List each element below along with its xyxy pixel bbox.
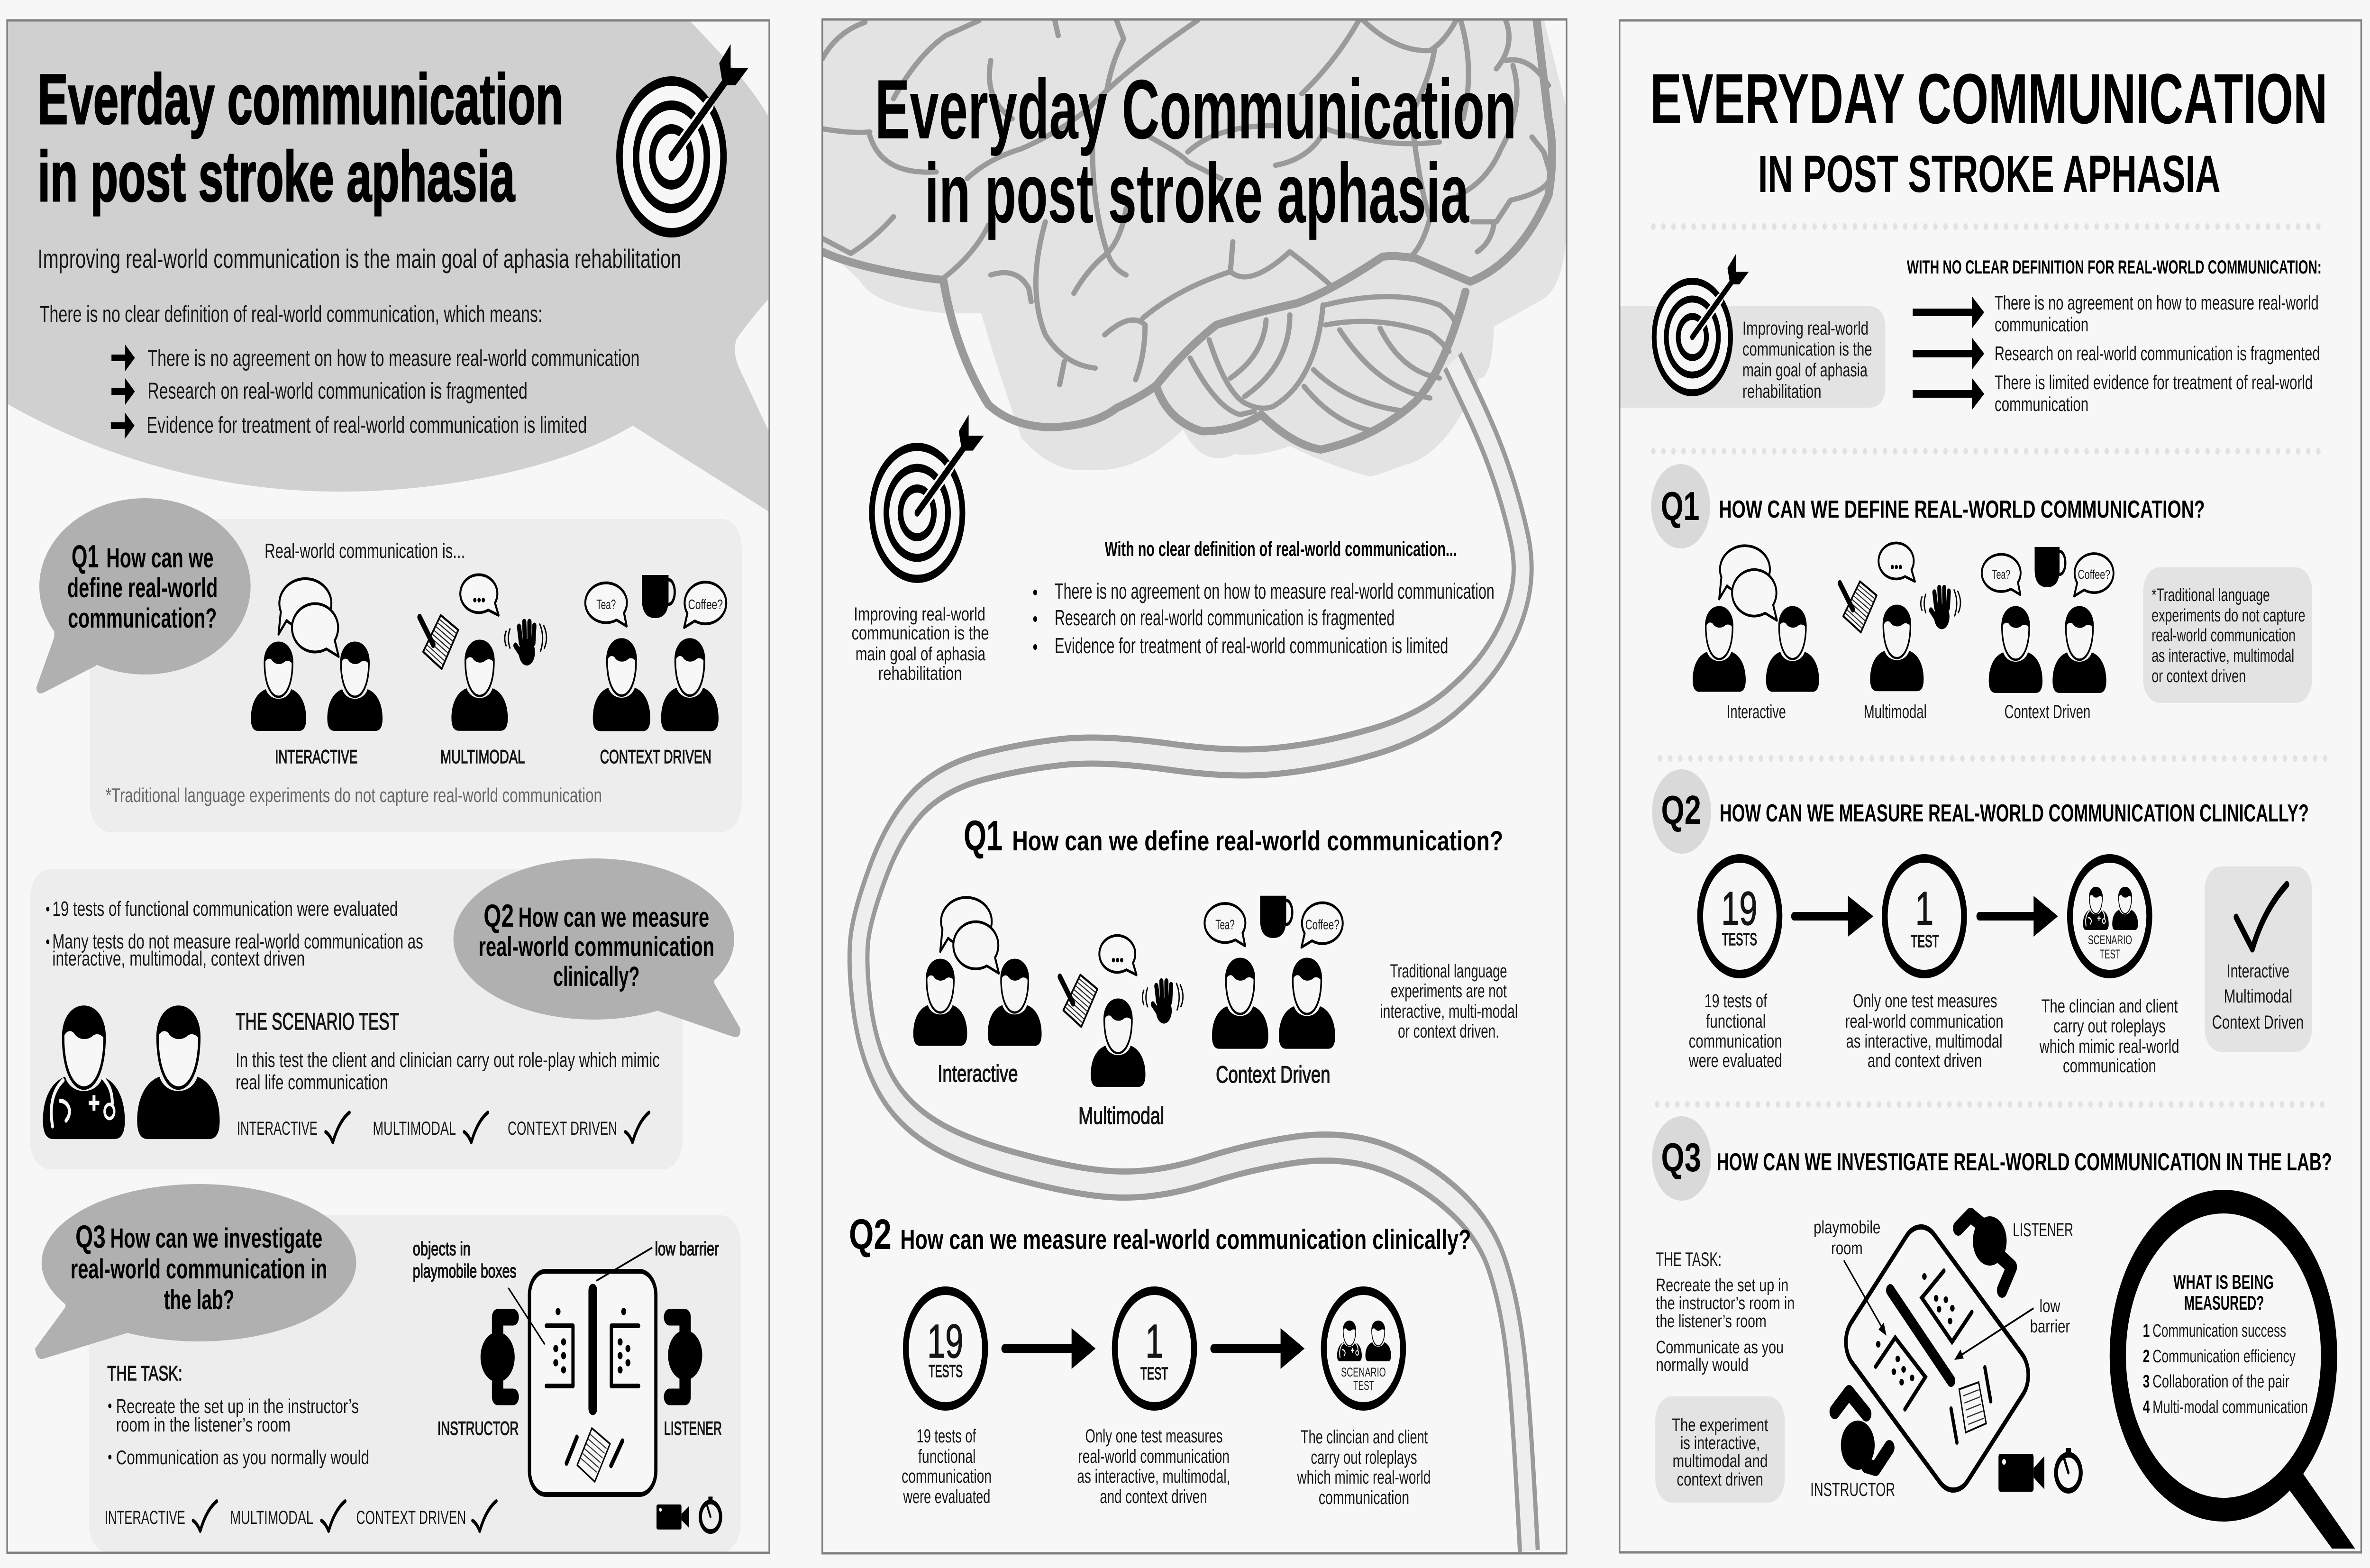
room labels: [1810, 1217, 2073, 1500]
magnifying glass: [2118, 1202, 2355, 1549]
Q2 tick box: [2205, 866, 2312, 1052]
Q1 speech bubble: communication?: [68, 603, 217, 634]
Q2 speech bubble: real-world communication: [478, 931, 714, 962]
task description: Communication as you normally would: [116, 1446, 369, 1468]
room labels: low: [2040, 1296, 2060, 1316]
title: EVERYDAY COMMUNICATION: [1650, 60, 2327, 139]
goal text: communication is the: [1742, 339, 1872, 360]
scenario test description: In this test the client and clinician carry out role-play which mimic: [236, 1048, 660, 1071]
Q1 labels: [275, 747, 711, 767]
task text: [1656, 1248, 1795, 1375]
heading: Q1: [1651, 464, 2205, 548]
goal caption: main goal of aphasia: [856, 644, 986, 665]
title: Everyday Communication: [875, 63, 1516, 156]
goal text: main goal of aphasia: [1742, 360, 1868, 381]
magnifying glass: 3: [2143, 1371, 2150, 1391]
magnifying glass: 4: [2143, 1397, 2150, 1417]
Q1 note box: or context driven: [2151, 666, 2246, 686]
arrow list: [111, 345, 639, 439]
Q1 labels: [1727, 702, 2090, 722]
title: [38, 60, 563, 217]
room labels: objects in: [413, 1239, 471, 1259]
definition heading: WITH NO CLEAR DEFINITION FOR REAL-WORLD COMMUNICATION:: [1907, 256, 2322, 278]
heading: Q1: Q1: [964, 812, 1003, 860]
Q1 note: Traditional language: [1390, 961, 1507, 982]
Q1 note box: [2143, 567, 2312, 703]
Q1 note: interactive, multi-modal: [1380, 1001, 1518, 1022]
task text: normally would: [1656, 1355, 1749, 1375]
title: [1650, 60, 2327, 203]
icon: target with arrow: [1654, 254, 1749, 393]
icon: multimodal person: [1840, 543, 1960, 691]
Q3 speech bubble: real-world communication in: [71, 1254, 327, 1285]
icon: video camera: [1998, 1454, 2044, 1492]
arrow list: Research on real-world communication is fragmented: [147, 378, 528, 403]
scenario test description: THE SCENARIO TEST: [236, 1009, 399, 1035]
circle: 19 tests: TESTS: [929, 1361, 963, 1381]
scenario test description: real life communication: [236, 1070, 388, 1094]
task description: [107, 1361, 369, 1468]
room diagram: [529, 1271, 656, 1495]
icon: context driven people: Tea?: [596, 597, 616, 612]
caption: scenario test: communication: [1319, 1487, 1409, 1508]
Q3 speech bubble: the lab?: [164, 1285, 234, 1315]
circle: 1 test: [1115, 1291, 1194, 1406]
icon: context driven people: Tea?: [1215, 918, 1235, 932]
goal caption: [851, 604, 989, 684]
task checks: INTERACTIVE: [105, 1507, 185, 1528]
Q1 labels: Multimodal: [1078, 1103, 1164, 1130]
icon: clinician: [43, 1007, 125, 1139]
caption: scenario test: [2039, 996, 2179, 1076]
magnifying glass: Communication efficiency: [2152, 1346, 2296, 1366]
icon: interactive people: [1693, 546, 1819, 692]
caption: 1 test: [1077, 1426, 1230, 1507]
icon: multimodal person: [1060, 936, 1183, 1087]
circle: scenario test: SCENARIO: [2088, 933, 2132, 947]
circle: 1 test: 1: [1915, 882, 1933, 935]
caption: scenario test: The clincian and client: [1301, 1427, 1428, 1448]
Q1 speech bubble: Q1: [72, 538, 99, 574]
Q1 note: or context driven.: [1398, 1021, 1499, 1042]
magnifying glass: 2: [2143, 1346, 2150, 1366]
icon: instructor top view: [1835, 1393, 1889, 1470]
circle: 1 test: 1: [1145, 1315, 1164, 1368]
goal text: [1742, 318, 1872, 402]
goal caption: Improving real-world: [854, 604, 985, 625]
icon: client: [137, 1007, 220, 1139]
room labels: LISTENER: [664, 1418, 722, 1439]
scenario checks: [237, 1112, 649, 1142]
room labels: low barrier: [655, 1239, 719, 1259]
arrow: [1794, 896, 1873, 937]
arrow: [1213, 1328, 1304, 1369]
title: in post stroke aphasia: [38, 137, 515, 217]
goal band: [1620, 306, 1886, 408]
caption: 1 test: [1845, 991, 2004, 1071]
circle: scenario test: TEST: [1353, 1378, 1374, 1393]
heading: Q2: [1652, 769, 2309, 854]
heading: Q2: Q2: [1661, 788, 1701, 833]
arrow list: There is limited evidence for treatment of real-world: [1995, 371, 2313, 393]
experiment note box: The experiment: [1672, 1415, 1768, 1435]
panel frame: [7, 20, 769, 1553]
room labels: [413, 1239, 722, 1439]
Q1 labels: [938, 1061, 1331, 1130]
goal caption: rehabilitation: [878, 663, 962, 684]
room diagram rotated: [1838, 1215, 2036, 1502]
heading: Q2: How can we measure real-world communication clinically?: [900, 1224, 1471, 1255]
room labels: INSTRUCTOR: [438, 1418, 519, 1439]
title: [875, 63, 1516, 240]
definition bullet list: [1033, 537, 1495, 658]
arrow list: communication: [1995, 393, 2088, 415]
heading: Q3: [1652, 1116, 2332, 1201]
experiment note box: context driven: [1677, 1469, 1763, 1489]
task text: Communicate as you: [1656, 1337, 1784, 1357]
caption: 1 test: and context driven: [1100, 1486, 1207, 1507]
icon: listener top view: [1958, 1215, 2012, 1290]
heading: Q3: HOW CAN WE INVESTIGATE REAL-WORLD COMMUNICATION IN THE LAB?: [1717, 1149, 2332, 1176]
icon: context driven people: Coffee?: [2078, 567, 2110, 582]
panel: Q1 definition: [36, 498, 742, 832]
heading: Q2: [849, 1211, 1471, 1258]
caption: 1 test: as interactive, multimodal: [1846, 1031, 2002, 1052]
circle: scenario test: TEST: [2100, 947, 2120, 961]
Q1 note: experiments are not: [1391, 981, 1507, 1002]
Q2 speech bubble: [454, 858, 740, 1037]
Q2 speech bubble: clinically?: [553, 961, 639, 992]
arrow: [1004, 1328, 1095, 1369]
definition bullet list: With no clear definition of real-world communication...: [1105, 537, 1457, 560]
caption: 1 test: real-world communication: [1078, 1446, 1230, 1467]
caption: 19 tests: 19 tests of: [1705, 991, 1767, 1012]
Q1 labels: Context Driven: [1216, 1062, 1331, 1088]
goal text: rehabilitation: [1742, 381, 1822, 402]
arrow list: [1913, 292, 2320, 415]
circle: 1 test: [1885, 858, 1964, 974]
icon: timer: [2056, 1448, 2081, 1491]
icon: context driven people: [1982, 547, 2114, 693]
caption: 19 tests: 19 tests of: [917, 1426, 976, 1447]
brain silhouette: [822, 19, 1567, 476]
task description: room in the listener’s room: [116, 1413, 291, 1436]
task text: Recreate the set up in: [1656, 1275, 1788, 1295]
caption: scenario test: communication: [2063, 1056, 2156, 1076]
magnifying glass: 1: [2143, 1321, 2150, 1340]
Q3 speech bubble: [35, 1184, 356, 1359]
caption: scenario test: which mimic real-world: [2039, 1036, 2179, 1057]
heading: Q2: Q2: [849, 1211, 892, 1258]
intro text: [38, 245, 681, 327]
caption: 19 tests: [1688, 991, 1782, 1071]
icon: target with arrow: [872, 415, 984, 579]
arrow list: Research on real-world communication is fragmented: [1995, 342, 2320, 365]
task checks: CONTEXT DRIVEN: [356, 1507, 466, 1528]
caption: 1 test: Only one test measures: [1085, 1426, 1223, 1447]
intro text: Improving real-world communication is the main goal of aphasia rehabilitation: [38, 245, 681, 274]
magnifying glass: Multi-modal communication: [2152, 1397, 2308, 1417]
panel: version two brain design: [822, 19, 1567, 1553]
room labels: INSTRUCTOR: [1810, 1479, 1895, 1500]
arrow list: Evidence for treatment of real-world communication is limited: [146, 412, 587, 438]
brain outline and folds: [822, 21, 1552, 449]
arrow list: communication: [1995, 313, 2088, 336]
circle: 19 tests: 19: [927, 1315, 963, 1368]
caption: 19 tests: [902, 1426, 992, 1507]
panel: version one speech bubble design: [7, 20, 769, 1553]
Q1 note box: experiments do not capture: [2151, 605, 2306, 625]
icon: interactive people: [913, 897, 1042, 1046]
task description: Recreate the set up in the instructor’s: [116, 1395, 359, 1417]
task description: THE TASK:: [107, 1361, 182, 1385]
circle: 19 tests: 19: [1721, 882, 1757, 935]
scenario checks: CONTEXT DRIVEN: [508, 1118, 617, 1139]
room labels: playmobile boxes: [413, 1261, 517, 1282]
Q1 labels: Interactive: [938, 1061, 1018, 1087]
experiment note box: multimodal and: [1673, 1451, 1768, 1471]
task checks: [105, 1501, 496, 1531]
heading: Q1: Q1: [1661, 484, 1699, 529]
task text: THE TASK:: [1656, 1248, 1722, 1270]
panel: Q2 measurement: [30, 858, 740, 1169]
title: in post stroke aphasia: [925, 146, 1469, 240]
Q1 labels: CONTEXT DRIVEN: [600, 747, 711, 767]
caption: 1 test: and context driven: [1868, 1050, 1982, 1071]
Q1 note: [1380, 961, 1518, 1042]
caption: 1 test: real-world communication: [1845, 1011, 2004, 1032]
icon: multimodal person: [419, 574, 547, 731]
circle: 19 tests: [906, 1291, 985, 1406]
heading: Q1: [964, 812, 1503, 860]
magnifying glass: Collaboration of the pair: [2152, 1371, 2289, 1391]
caption: 19 tests: communication: [1689, 1031, 1782, 1052]
icon: video camera: [656, 1504, 689, 1530]
room labels: barrier: [2030, 1316, 2070, 1336]
Q2 findings: Many tests do not measure real-world communication as: [52, 930, 423, 953]
arrow list: There is no agreement on how to measure real-world: [1995, 292, 2319, 314]
Q1 speech bubble: define real-world: [67, 573, 218, 603]
panel: Q3 lab task: [35, 1184, 741, 1552]
Q2 speech bubble: How can we measure: [519, 902, 709, 933]
circle: scenario test: [1324, 1291, 1403, 1406]
heading: Q2: HOW CAN WE MEASURE REAL-WORLD COMMUNICATION CLINICALLY?: [1720, 800, 2309, 827]
Q1 speech bubble: [36, 498, 251, 693]
scenario test description: [236, 1009, 660, 1094]
icon: timer: [701, 1496, 720, 1532]
icon: instructor top view: [481, 1317, 515, 1397]
Q2 findings: [46, 897, 423, 970]
icon: context driven people: Tea?: [1992, 567, 2010, 582]
intro text: There is no clear definition of real-world communication, which means:: [40, 301, 542, 327]
definition bullet list: Evidence for treatment of real-world communication is limited: [1055, 634, 1448, 658]
icon: interactive people: [251, 579, 383, 731]
caption: 19 tests: were evaluated: [903, 1486, 990, 1507]
magnifying glass: MEASURED?: [2184, 1292, 2264, 1314]
icon: context driven people: [1204, 896, 1343, 1049]
icon: context driven people: Coffee?: [688, 597, 723, 612]
spinal cord ribbon: [858, 361, 1529, 1551]
Q2 tick box: Context Driven: [2212, 1012, 2304, 1033]
caption: 1 test: as interactive, multimodal,: [1077, 1466, 1230, 1487]
definition bullet list: There is no agreement on how to measure real-world communication: [1055, 579, 1495, 603]
Q1 lead text: Real-world communication is...: [264, 539, 465, 562]
Q1 labels: MULTIMODAL: [440, 747, 525, 767]
icon: listener top view: [668, 1317, 702, 1397]
task checks: MULTIMODAL: [230, 1507, 313, 1528]
magnifying glass: WHAT IS BEING: [2173, 1271, 2274, 1293]
icon: target with arrow: [620, 44, 748, 233]
Q1 labels: INTERACTIVE: [275, 747, 357, 767]
arrow: [1979, 896, 2058, 937]
experiment note box: [1655, 1396, 1785, 1503]
arrow list: There is no agreement on how to measure real-world communication: [147, 346, 639, 371]
Q1 labels: Interactive: [1727, 702, 1786, 722]
Q3 speech bubble: Q3: [75, 1219, 106, 1255]
Q1 speech bubble: How can we: [106, 543, 213, 574]
Q3 speech bubble: How can we investigate: [110, 1223, 322, 1254]
Q1 note box: *Traditional language: [2151, 585, 2270, 605]
header speech bubble: [7, 21, 769, 512]
caption: scenario test: The clincian and client: [2042, 996, 2178, 1017]
icon: context driven people: Coffee?: [1305, 918, 1340, 932]
experiment note box: is interactive,: [1680, 1433, 1760, 1453]
panel frame: [822, 19, 1567, 1553]
Q1 labels: Context Driven: [2005, 702, 2090, 722]
task text: the instructor’s room in: [1656, 1293, 1795, 1313]
room labels: LISTENER: [2013, 1220, 2073, 1240]
caption: scenario test: carry out roleplays: [2053, 1016, 2166, 1037]
scenario checks: INTERACTIVE: [237, 1118, 318, 1139]
caption: 19 tests: communication: [902, 1466, 992, 1487]
goal caption: communication is the: [851, 623, 989, 644]
Q2 findings: 19 tests of functional communication were evaluated: [52, 897, 398, 920]
circle: scenario test: SCENARIO: [1341, 1365, 1386, 1379]
task text: the listener’s room: [1656, 1311, 1767, 1331]
panel frame: [1620, 20, 2361, 1552]
caption: 19 tests: functional: [1706, 1011, 1766, 1032]
caption: 1 test: Only one test measures: [1853, 991, 1997, 1012]
Q2 findings: interactive, multimodal, context driven: [52, 947, 305, 970]
room labels: playmobile: [1814, 1217, 1880, 1237]
circle: 1 test: TEST: [1140, 1364, 1168, 1383]
icon: context driven people: [585, 575, 726, 731]
Q1 footnote: *Traditional language experiments do not capture real-world communication: [106, 784, 602, 806]
circle: 1 test: TEST: [1911, 931, 1939, 951]
panel: version three numbered sections: [1620, 20, 2361, 1552]
circle: 19 tests: TESTS: [1722, 930, 1757, 949]
circle: scenario test: [2070, 858, 2149, 974]
caption: scenario test: carry out roleplays: [1311, 1447, 1417, 1468]
caption: scenario test: which mimic real-world: [1297, 1467, 1431, 1488]
title: IN POST STROKE APHASIA: [1758, 145, 2221, 203]
title: Everday communication: [38, 60, 563, 139]
Q2 tick box: Interactive: [2227, 961, 2289, 982]
Q1 note box: as interactive, multimodal: [2151, 646, 2294, 665]
magnifying glass: Communication success: [2152, 1321, 2286, 1340]
caption: 19 tests: were evaluated: [1688, 1050, 1782, 1071]
room labels: room: [1831, 1238, 1863, 1258]
caption: scenario test: [1297, 1427, 1431, 1508]
heading: Q3: Q3: [1661, 1135, 1701, 1180]
heading: Q1: HOW CAN WE DEFINE REAL-WORLD COMMUNICATION?: [1719, 496, 2205, 523]
goal text: Improving real-world: [1742, 318, 1869, 339]
Q2 speech bubble: Q2: [483, 898, 514, 934]
heading: Q1: How can we define real-world communication?: [1012, 826, 1503, 857]
Q1 note box: real-world communication: [2151, 625, 2296, 645]
caption: 19 tests: functional: [918, 1446, 975, 1467]
Q1 labels: Multimodal: [1864, 702, 1927, 722]
definition bullet list: Research on real-world communication is fragmented: [1055, 606, 1395, 630]
Q2 tick box: Multimodal: [2224, 986, 2292, 1007]
scenario checks: MULTIMODAL: [373, 1118, 456, 1139]
circle: 19 tests: [1700, 858, 1779, 974]
